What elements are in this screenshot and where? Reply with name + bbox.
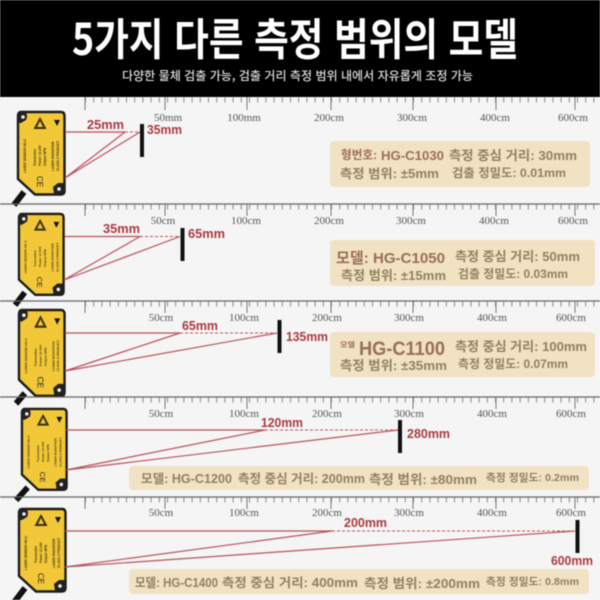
icon: laser sensor 4: CE	[38, 472, 47, 483]
ruler: row 5: 200cm	[312, 507, 342, 519]
panel: HG-C1100 row	[0, 301, 600, 404]
label: 120mm: 120mm	[261, 415, 303, 430]
label: 135mm: 135mm	[286, 329, 328, 344]
icon: laser sensor 2	[15, 214, 64, 305]
ruler: row 1: 300cm	[397, 112, 427, 124]
icon: laser sensor 1: LASER SENSOR HG-C	[23, 138, 27, 173]
ruler: row 3: 200cm	[312, 312, 342, 324]
icon: laser sensor 2: Power 12-24V	[38, 246, 42, 267]
ruler: row 2: 100cm	[231, 215, 261, 227]
icon: laser sensor 2: CLASS 2 PRODUCT	[55, 242, 59, 272]
spec panel 3: 모델	[340, 340, 356, 349]
ruler: row 4: 600cm	[556, 408, 586, 420]
spec panel 4: 측정 정밀도: 0.2mm	[486, 472, 579, 484]
beams: row 5	[65, 531, 575, 567]
subtitle: 다양한 물체 검출 가능, 검출 거리 측정 범위 내에서 자유롭게 조정 가능	[122, 67, 473, 84]
panel: HG-C1050 row	[0, 204, 600, 305]
icon: laser sensor 5: Power 12-24V	[39, 541, 43, 563]
ruler: row 3: 400cm	[477, 312, 507, 324]
spec panel 1	[330, 141, 590, 187]
icon: laser sensor 1: Power 12-24V	[38, 144, 42, 166]
label: 25mm: 25mm	[87, 117, 124, 132]
spec panel 5: 측정 정밀도: 0.8mm	[486, 576, 579, 588]
ruler: row 4: 400cm	[477, 408, 507, 420]
beams: row 1	[65, 132, 140, 178]
spec panel 1: 형번호:	[341, 147, 377, 162]
ruler: row 3	[0, 301, 600, 324]
icon: laser sensor 5: LASER SENSOR HG-C	[24, 535, 28, 570]
ruler: row 1: 50mm	[154, 112, 182, 124]
icon: laser sensor 5: Transmitter	[34, 545, 38, 563]
ruler: row 4: 50cm	[149, 408, 174, 420]
target bar 5	[576, 520, 580, 553]
ruler: row 1: 100mm	[227, 112, 261, 124]
label: 65mm: 65mm	[182, 318, 218, 333]
ruler: row 5: 400cm	[477, 507, 507, 519]
ruler: row 5: 300cm	[394, 507, 424, 519]
icon: laser sensor 2: LASER SENSOR HG-C	[24, 239, 28, 274]
icon: laser sensor 2: Transmitter	[33, 249, 37, 267]
spec panel 1: HG-C1030	[381, 148, 444, 163]
icon: laser sensor 4: Output NPN	[46, 443, 50, 462]
icon: laser sensor 2: LASER RADIATION	[51, 242, 55, 272]
panel: HG-C1400 row	[0, 497, 600, 600]
ruler: row 1: 400cm	[480, 112, 510, 124]
spec panel 4	[129, 466, 589, 490]
icon: laser sensor 4	[16, 409, 67, 500]
label: 600mm: 600mm	[551, 553, 593, 568]
ruler: row 1	[85, 97, 600, 124]
ruler: row 5: 100cm	[229, 507, 259, 519]
ruler: row 5	[0, 497, 600, 519]
label: 65mm: 65mm	[188, 226, 225, 241]
icon: laser sensor 5	[12, 509, 66, 600]
spec panel 3	[330, 332, 595, 377]
icon: laser sensor 2: CE	[35, 277, 44, 288]
spec panel 2: 측정 범위: ±15mm	[341, 268, 446, 283]
ruler: row 2: 50cm	[151, 215, 176, 227]
icon: laser sensor 3: CLASS 2 PRODUCT	[56, 340, 60, 371]
spec panel 2: 검출 정밀도: 0.03mm	[458, 267, 568, 281]
spec panel 2: 모델: HG-C1050	[336, 250, 445, 267]
icon: laser sensor 1: Output NPN	[43, 147, 47, 166]
icon: laser sensor 2: Output NPN	[43, 248, 47, 267]
icon: laser sensor 1: CLASS 2 PRODUCT	[56, 141, 60, 171]
ruler: row 4: 200cm	[312, 408, 342, 420]
ruler: row 2: 300cm	[396, 215, 426, 227]
ruler: row 4: 300cm	[394, 408, 424, 420]
spec panel 5: 측정 범위: ±200mm	[364, 576, 480, 591]
label: 200mm: 200mm	[344, 515, 387, 530]
spec panel 3: 측정 정밀도: 0.07mm	[458, 357, 568, 371]
icon: laser sensor 5: CLASS 2 PRODUCT	[57, 538, 61, 568]
spec panel 5	[129, 569, 589, 594]
spec panel 4: 측정 범위: ±80mm	[369, 472, 477, 487]
target bar 1	[140, 124, 144, 157]
icon: laser sensor 1: LASER RADIATION	[51, 141, 55, 171]
label: 280mm: 280mm	[407, 426, 450, 441]
header banner	[0, 0, 600, 97]
ruler: row 1: 200cm	[314, 112, 344, 124]
icon: laser sensor 4: CLASS 2 PRODUCT	[58, 437, 62, 467]
icon: laser sensor 3: Output NPN	[44, 347, 47, 366]
spec panel 4: 측정 중심 거리: 200mm	[238, 471, 365, 486]
ruler: row 2: 600cm	[558, 215, 588, 227]
ruler: row 3: 100cm	[229, 312, 259, 324]
ruler: row 2: 200cm	[314, 215, 344, 227]
icon: laser sensor 1: CE	[35, 176, 44, 187]
icon: laser sensor 1: Transmitter	[33, 148, 37, 166]
beams: row 4	[66, 430, 398, 470]
spec panel 4: 모델: HG-C1200	[141, 472, 232, 486]
spec panel 1: 측정 범위: ±5mm	[340, 167, 439, 181]
icon: laser sensor 4: Transmitter	[36, 444, 40, 462]
panel: HG-C1200 row	[0, 397, 600, 500]
icon: laser sensor 4: LASER SENSOR HG-C	[27, 434, 31, 469]
ruler: row 5: 600cm	[556, 507, 586, 519]
ruler: row 4: 100cm	[229, 408, 259, 420]
ruler: row 2	[0, 204, 600, 227]
icon: laser sensor 1	[14, 112, 64, 205]
spec panel 3: 측정 중심 거리: 100mm	[455, 339, 587, 354]
ruler: row 2: 400cm	[479, 215, 509, 227]
spec panel 3: 측정 범위: ±35mm	[340, 358, 447, 373]
target bar 2	[180, 228, 184, 261]
icon: laser sensor 3: Power 12-24V	[39, 344, 42, 366]
ruler: row 3: 600cm	[556, 312, 586, 324]
icon: laser sensor 3: CE	[36, 377, 44, 389]
spec panel 5: 측정 중심 거리: 400mm	[222, 575, 358, 590]
icon: laser sensor 4: LASER RADIATION	[54, 437, 58, 467]
target bar 3	[278, 320, 282, 353]
label: 35mm: 35mm	[147, 122, 182, 137]
ruler: row 1: 600cm	[558, 112, 588, 124]
ruler: row 3: 50cm	[149, 312, 174, 324]
icon: laser sensor 3	[16, 310, 65, 404]
icon: laser sensor 3: Transmitter	[34, 347, 38, 366]
ruler: row 5: 50cm	[149, 507, 174, 519]
label: 35mm: 35mm	[103, 221, 140, 236]
ruler: row 3: 300cm	[394, 312, 424, 324]
icon: laser sensor 3: LASER SENSOR HG-C	[24, 337, 28, 373]
spec panel 3: HG-C1100	[359, 339, 445, 360]
title: 5가지 다른 측정 범위의 모델	[72, 4, 518, 68]
icon: laser sensor 3: LASER RADIATION	[51, 340, 55, 371]
ruler: row 4	[0, 397, 600, 420]
target bar 4	[398, 420, 402, 453]
beams: row 2	[64, 236, 180, 280]
spec panel 5: 모델: HG-C1400	[135, 576, 218, 590]
spec panel 1: 검출 정밀도: 0.01mm	[452, 166, 566, 180]
beams: row 3	[65, 333, 277, 371]
icon: laser sensor 5: Output NPN	[44, 544, 48, 563]
spec panel 2: 측정 중심 거리: 50mm	[455, 249, 580, 264]
panel: HG-C1030 row	[14, 97, 600, 205]
icon: laser sensor 4: Power 12-24V	[41, 441, 45, 462]
spec panel 1: 측정 중심 거리: 30mm	[449, 148, 577, 163]
icon: laser sensor 5: LASER RADIATION	[52, 538, 56, 568]
icon: laser sensor 5: CE	[36, 573, 45, 584]
spec panel 2	[330, 240, 595, 286]
